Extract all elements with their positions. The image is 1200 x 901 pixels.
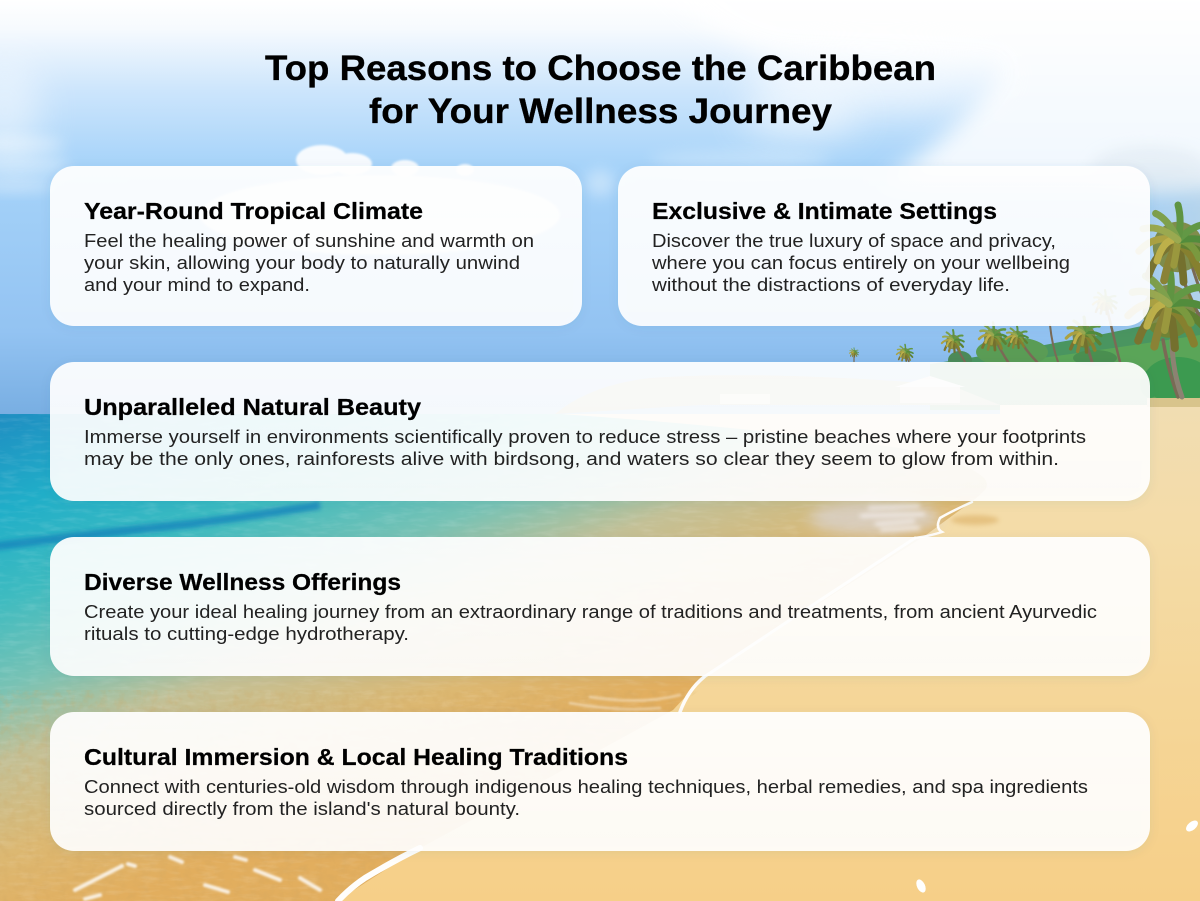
body text: Discover the true luxury of space and privacy, xyxy=(652,231,1056,251)
sky xyxy=(0,0,1200,415)
body text: Immerse yourself in environments scientifically proven to reduce stress – pristine beaches where your footprints xyxy=(84,427,1086,447)
body text xyxy=(84,602,1097,644)
body text: rituals to cutting-edge hydrotherapy. xyxy=(84,624,409,644)
body text xyxy=(84,231,534,295)
water texture xyxy=(0,414,1000,901)
wet sand texture xyxy=(0,690,314,812)
sand strip xyxy=(1147,398,1200,407)
panel: unparalleled natural beauty xyxy=(50,362,1150,501)
foam along shore xyxy=(75,502,972,901)
small cloud above first panel xyxy=(200,145,560,255)
title xyxy=(265,48,936,131)
body text xyxy=(84,427,1086,469)
body text: Connect with centuries-old wisdom through indigenous healing techniques, herbal remedies, and spa ingredients xyxy=(84,777,1088,797)
body text: sourced directly from the island's natural bounty. xyxy=(84,799,520,819)
sand marks xyxy=(951,515,999,525)
heading: unparalleled natural beauty: Unparalleled Natural Beauty xyxy=(84,394,421,420)
foam at water edge near sand xyxy=(809,500,941,536)
panel: year-round tropical climate xyxy=(50,166,582,326)
body text: and your mind to expand. xyxy=(84,275,310,295)
sea and sand xyxy=(0,405,1200,901)
body text: without the distractions of everyday life. xyxy=(651,275,1010,295)
hills xyxy=(930,312,1200,410)
panel: diverse wellness offerings xyxy=(50,537,1150,676)
body text: Create your ideal healing journey from an extraordinary range of traditions and treatments, from ancient Ayurvedic xyxy=(84,602,1097,622)
body text xyxy=(651,231,1070,295)
body text: may be the only ones, rainforests alive with birdsong, and waters so clear they seem to glow from within. xyxy=(84,449,1059,469)
panel: exclusive and intimate settings xyxy=(618,166,1150,326)
panel: cultural immersion and local healing traditions xyxy=(50,712,1150,851)
dark streak in water xyxy=(0,505,320,547)
heading: exclusive and intimate settings: Exclusive & Intimate Settings xyxy=(652,198,997,224)
body text: Feel the healing power of sunshine and warmth on xyxy=(84,231,534,251)
bushes xyxy=(948,337,1200,403)
body text xyxy=(84,777,1088,819)
body text: where you can focus entirely on your wellbeing xyxy=(651,253,1070,273)
heading: cultural immersion: Cultural Immersion & Local Healing Traditions xyxy=(84,744,628,770)
heading: year-round tropical climate: Year-Round Tropical Climate xyxy=(84,198,423,224)
clouds xyxy=(0,0,1200,197)
pebbles xyxy=(914,818,1200,894)
headland and buildings xyxy=(555,375,1000,414)
title: Top Reasons to Choose the Caribbean xyxy=(265,48,936,88)
body text: your skin, allowing your body to naturally unwind xyxy=(84,253,520,273)
palm trees xyxy=(849,205,1200,397)
right sky tint xyxy=(1100,170,1200,410)
title: for Your Wellness Journey xyxy=(369,91,832,131)
heading: diverse wellness offerings: Diverse Wellness Offerings xyxy=(84,569,401,595)
